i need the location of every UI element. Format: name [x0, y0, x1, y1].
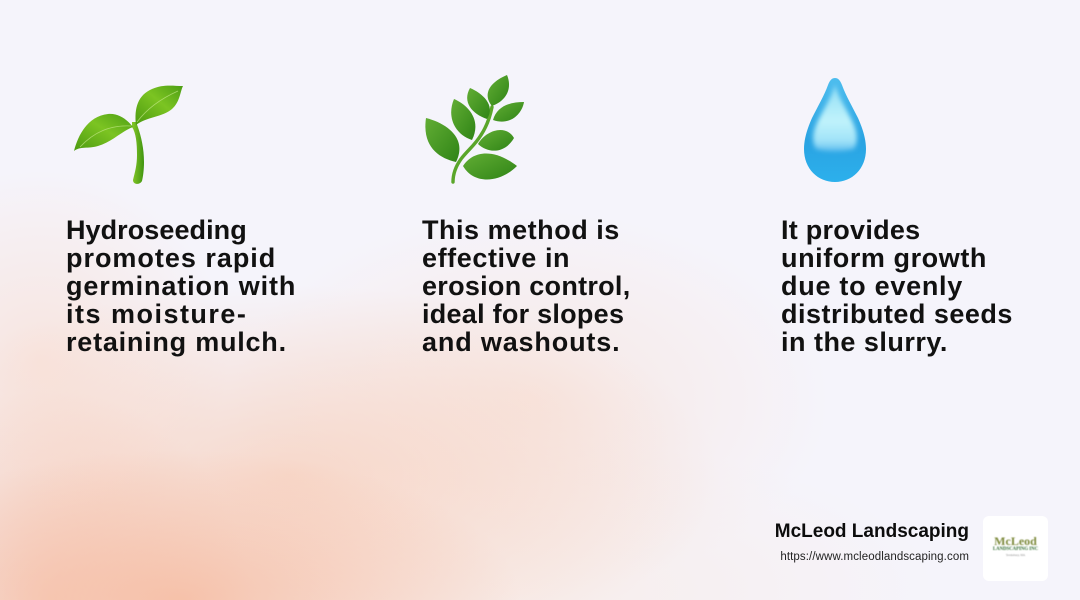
text block: rapid germination	[66, 215, 296, 357]
logo wordmark: McLeod	[994, 534, 1037, 548]
brand name: McLeod Landscaping	[775, 521, 969, 542]
text block: erosion control: effective in	[422, 243, 570, 273]
text block: erosion control: and washouts.	[422, 327, 620, 357]
text block: erosion control: ideal for slopes	[422, 299, 624, 329]
text block: rapid germination: Hydroseeding	[66, 215, 247, 245]
text block: uniform growth: uniform growth	[781, 243, 987, 273]
text block: uniform growth	[781, 215, 1013, 357]
icon: seedling	[74, 86, 183, 184]
text block: uniform growth: due to evenly	[781, 271, 963, 301]
icon: herb branch	[425, 75, 524, 182]
text block: uniform growth: distributed seeds	[781, 299, 1013, 329]
logo wordmark: Tewksbury, MA	[1006, 553, 1025, 557]
text block: rapid germination: promotes rapid	[66, 243, 276, 273]
text block: uniform growth: It provides	[781, 215, 920, 245]
text block: uniform growth: in the slurry.	[781, 327, 948, 357]
website url: https://www.mcleodlandscaping.com	[780, 551, 969, 563]
logo card	[983, 516, 1048, 581]
icon: water drop	[804, 78, 866, 182]
text block: rapid germination: retaining mulch.	[66, 327, 287, 357]
logo wordmark	[992, 534, 1038, 557]
text block: erosion control: erosion control,	[422, 271, 630, 301]
logo wordmark: LANDSCAPING INC	[993, 547, 1038, 552]
text block: erosion control	[422, 215, 630, 357]
text block: erosion control: This method is	[422, 215, 620, 245]
text block: rapid germination: germination with	[66, 271, 296, 301]
text block: rapid germination: its moisture-	[66, 299, 247, 329]
